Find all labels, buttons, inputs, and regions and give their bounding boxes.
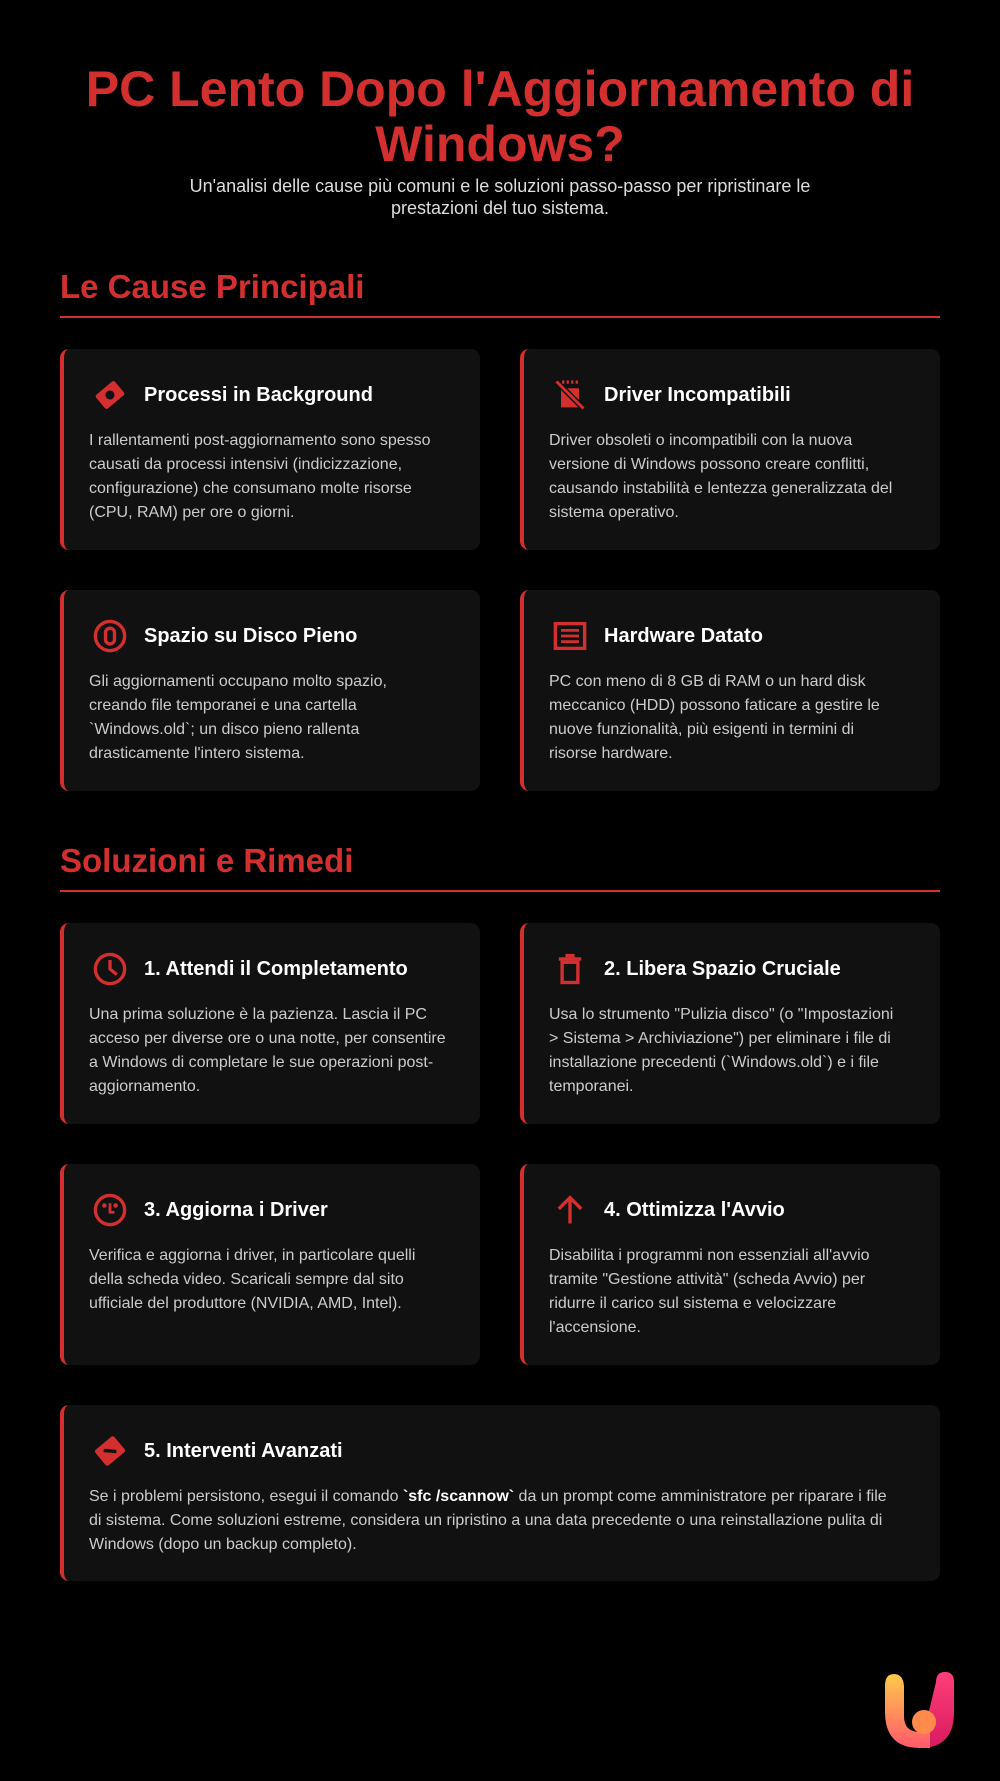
icon: clock xyxy=(94,952,126,986)
card: sol 2: Usa lo strumento "Pulizia disco" (o "Impostazioni > Sistema > Archiviazione") per eliminare i file di installazione precedenti (`Windows.old`) e i file temporanei. xyxy=(549,1006,893,1095)
card: driver xyxy=(520,349,940,550)
title xyxy=(86,61,914,172)
card: processi: I rallentamenti post-aggiornamento sono spesso causati da processi intensivi (indicizzazione, configurazione) che consumano molte risorse (CPU, RAM) per ore o giorni. xyxy=(89,432,431,521)
card: sol 5 xyxy=(60,1405,940,1581)
icon: driver face xyxy=(94,1194,126,1226)
card: sol 1: Una prima soluzione è la pazienza. Lascia il PC acceso per diverse ore o una notte, per consentire a Windows di completare le sue operazioni post-aggiornamento. xyxy=(89,1006,446,1095)
card: sol 4: Disabilita i programmi non essenziali all'avvio tramite "Gestione attività" (scheda Avvio) per ridurre il carico sul sistema e velocizzare l'accensione. xyxy=(549,1247,870,1336)
icon: driver xyxy=(556,380,584,410)
icon: disk xyxy=(94,620,126,652)
card: driver: Driver obsoleti o incompatibili con la nuova versione di Windows possono creare conflitti, causando instabilità e lentezza generalizzata del sistema operativo. xyxy=(549,432,892,521)
card: disco xyxy=(60,590,480,791)
card: sol 3: 3. Aggiorna i Driver xyxy=(144,1199,328,1221)
heading: solutions: Soluzioni e Rimedi xyxy=(60,842,353,879)
title: Windows? xyxy=(375,116,625,172)
icon: arrow up xyxy=(558,1195,582,1224)
card: disco: Gli aggiornamenti occupano molto spazio, creando file temporanei e una cartella `Windows.old`; un disco pieno rallenta drasticamente l'intero sistema. xyxy=(89,673,387,762)
logo xyxy=(885,1672,954,1748)
card: sol 4 xyxy=(520,1164,940,1365)
heading: causes: Le Cause Principali xyxy=(60,268,364,305)
title: PC Lento Dopo l'Aggiornamento di xyxy=(86,61,914,117)
card: hardware: Hardware Datato xyxy=(604,625,763,647)
card: disco: Spazio su Disco Pieno xyxy=(144,625,357,647)
card: sol 2 xyxy=(520,923,940,1124)
card: sol 3 xyxy=(60,1164,480,1365)
card: processi xyxy=(60,349,480,550)
icon: hardware xyxy=(554,622,586,650)
card: hardware xyxy=(520,590,940,791)
card: processi: Processi in Background xyxy=(144,384,373,406)
subtitle: Un'analisi delle cause più comuni e le soluzioni passo-passo per ripristinare le prestazioni del tuo sistema. xyxy=(190,176,810,218)
icon: tools xyxy=(94,1436,126,1466)
card: sol 1 xyxy=(60,923,480,1124)
card: hardware: PC con meno di 8 GB di RAM o un hard disk meccanico (HDD) possono faticare a gestire le nuove funzionalità, più esigenti in termini di risorse hardware. xyxy=(549,673,880,762)
icon: trash xyxy=(558,954,582,984)
card: sol 5: Se i problemi persistono, esegui il comando `sfc /scannow` da un prompt come amministratore per riparare i file di sistema. Come soluzioni estreme, considera un ripristino a una data precedente o una reinstallazione pulita di Windows (dopo un backup completo). xyxy=(89,1488,887,1553)
card: sol 2: 2. Libera Spazio Cruciale xyxy=(604,958,841,980)
card: driver: Driver Incompatibili xyxy=(604,384,791,406)
card: sol 5: 5. Interventi Avanzati xyxy=(144,1440,343,1462)
card: sol 1: 1. Attendi il Completamento xyxy=(144,958,408,980)
icon: processes xyxy=(96,381,124,409)
card: sol 3: Verifica e aggiorna i driver, in particolare quelli della scheda video. Scaricali sempre dal sito ufficiale del produttore (NVIDIA, AMD, Intel). xyxy=(89,1247,415,1312)
card: sol 4: 4. Ottimizza l'Avvio xyxy=(604,1199,785,1221)
